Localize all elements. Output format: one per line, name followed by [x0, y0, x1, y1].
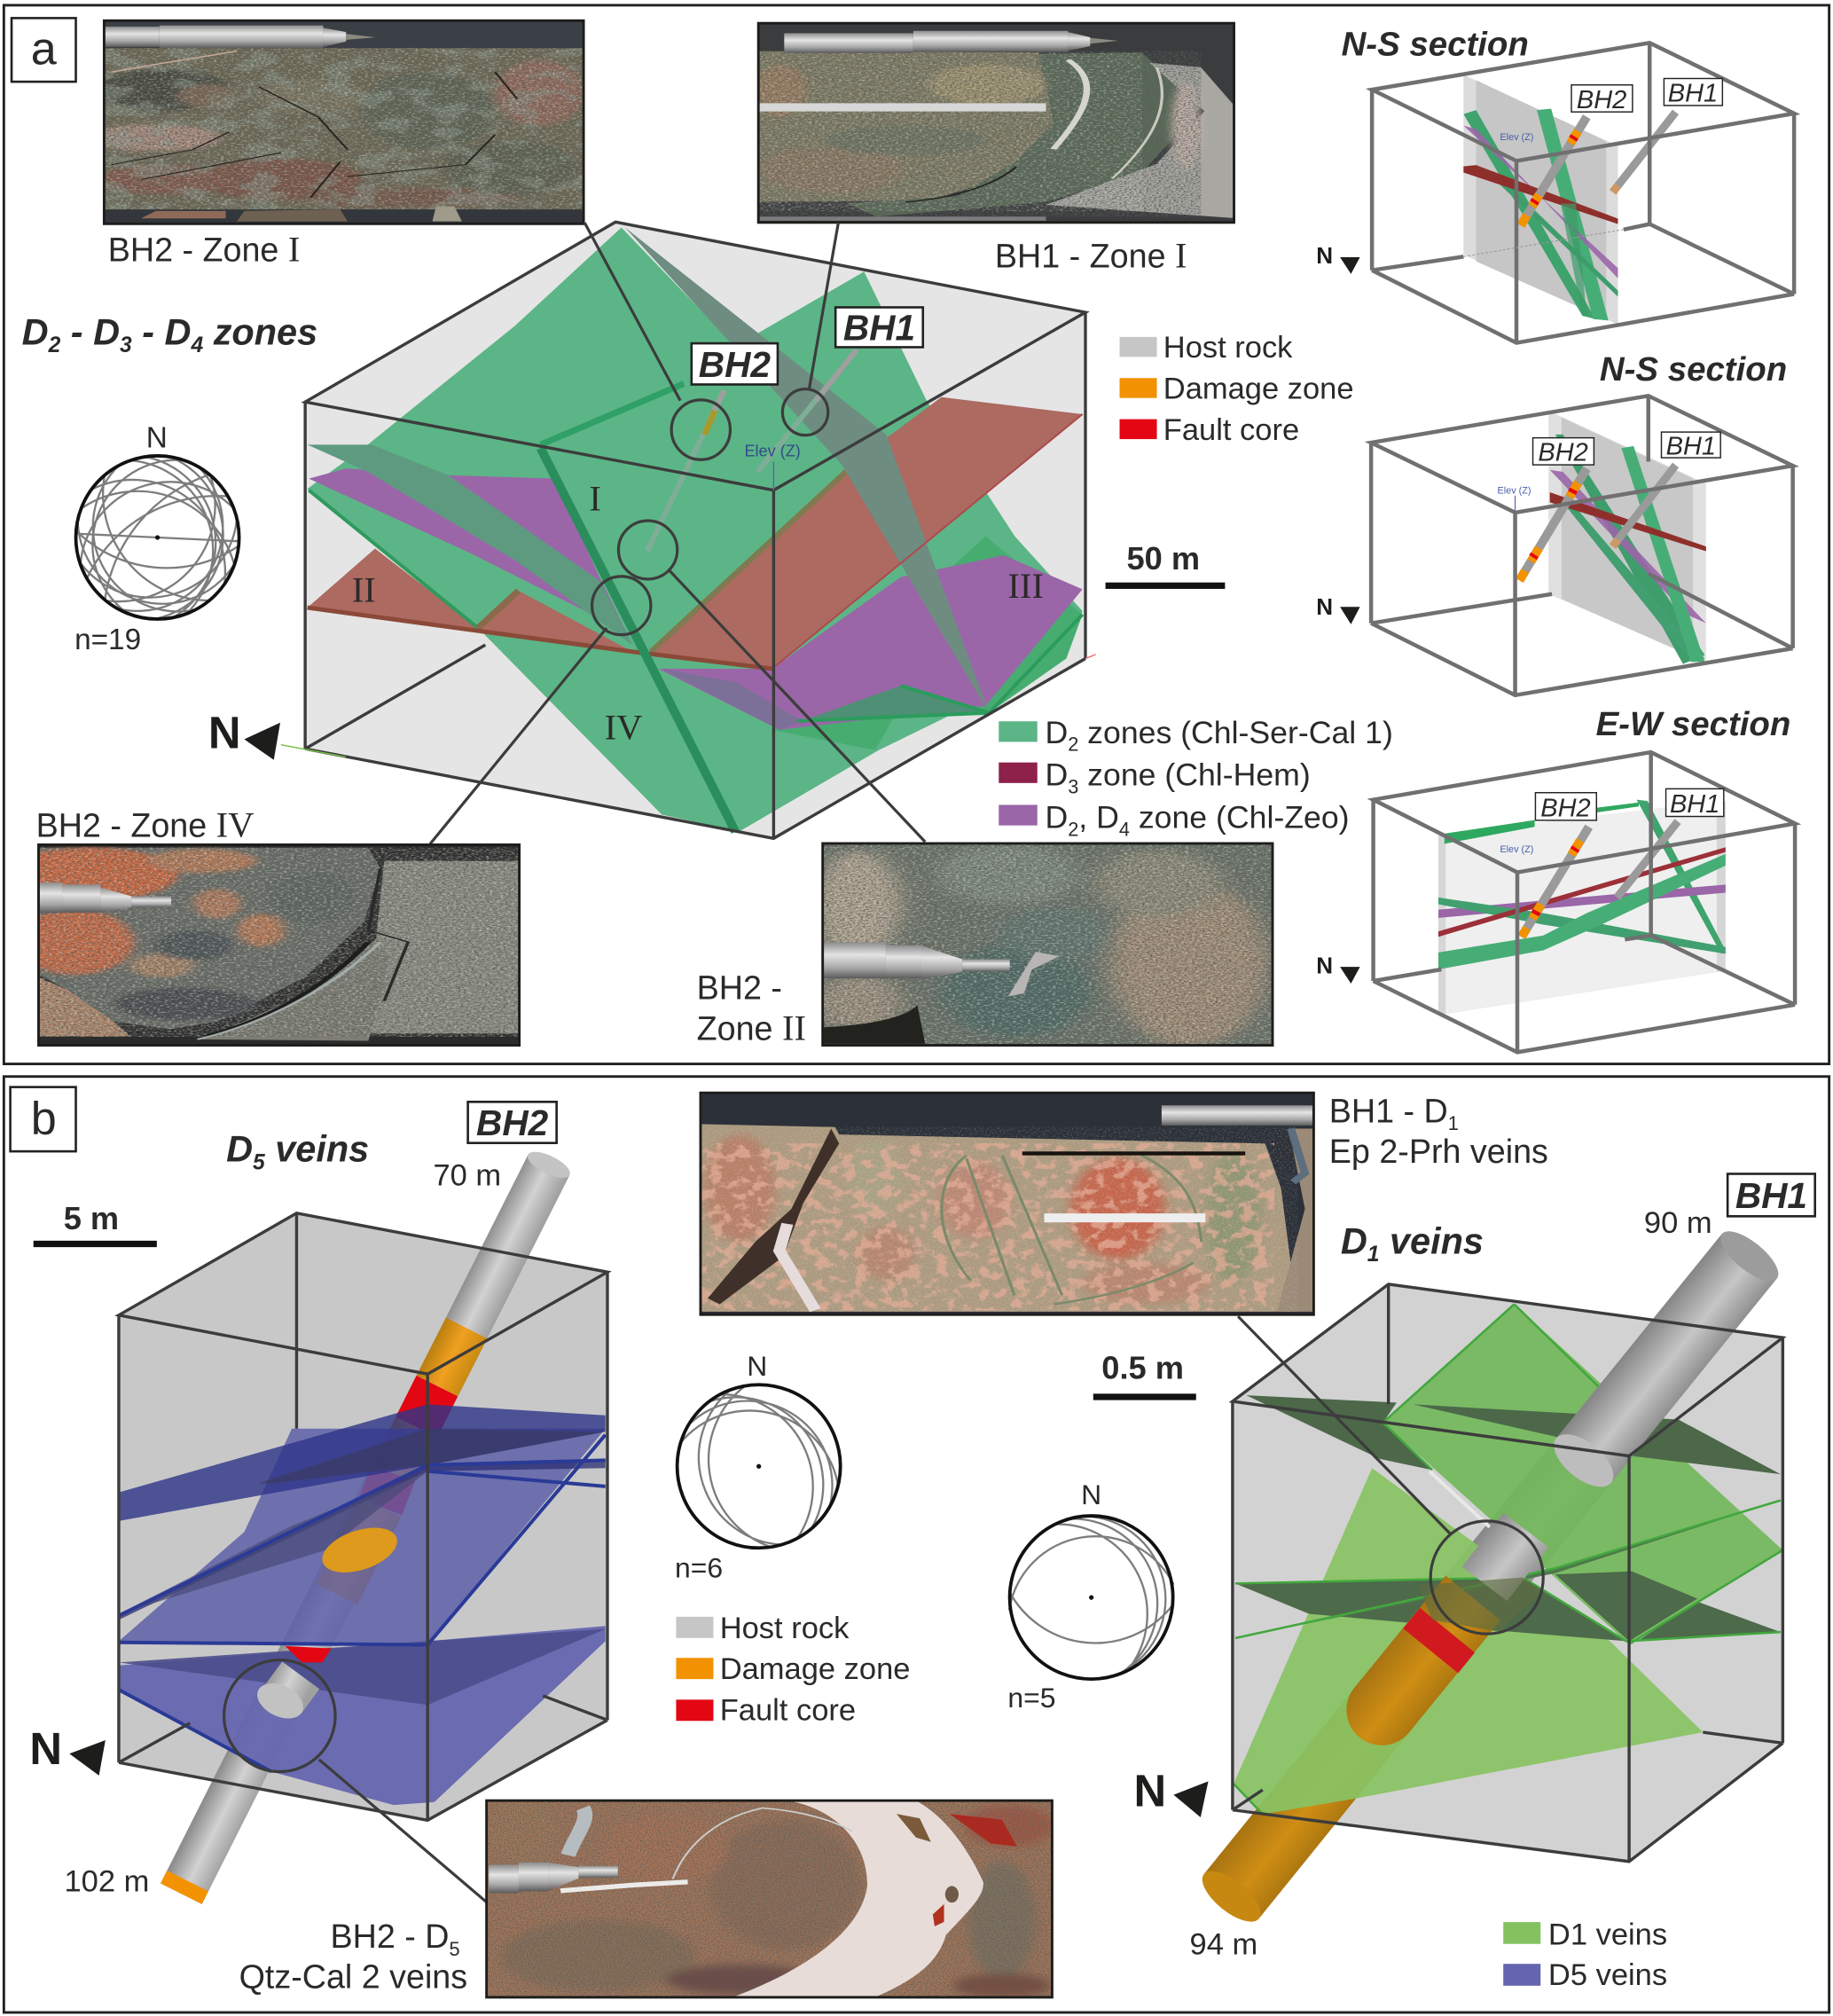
- stereonet n=5: N: [1081, 1479, 1101, 1510]
- section: N-S upper: N-S section: [1342, 25, 1529, 63]
- borehole top end: [1713, 1223, 1786, 1290]
- photo: BH1 Zone I core: [759, 25, 1233, 222]
- label BH2: BH2: [699, 344, 771, 385]
- stereonet n=5: [1007, 1479, 1173, 1714]
- borehole orange rounded end: [1346, 1675, 1417, 1745]
- stereonet n=6: [675, 1350, 841, 1584]
- label BH2: BH2: [476, 1102, 549, 1143]
- legend: zones: zone (Chl-Hem): [1078, 757, 1311, 793]
- heading: D2 D3 D4 zones: - D: [132, 311, 191, 353]
- scale bar 5 m: [34, 1200, 157, 1247]
- heading: D5 veins: veins: [265, 1128, 369, 1170]
- panel letter b: [11, 1087, 76, 1151]
- section: E-W: BH1: [1670, 790, 1719, 819]
- legend: zones: D: [1045, 757, 1068, 793]
- dark green plane left: [308, 444, 632, 645]
- heading: D2 D3 D4 zones: 2: [48, 333, 61, 357]
- legend: zones: , D: [1078, 800, 1119, 835]
- borehole red band: [1430, 1630, 1447, 1651]
- section: N-S upper: Elev (Z): [1500, 132, 1533, 143]
- sheet gap: [1430, 1471, 1490, 1527]
- legend: zones: 2: [1068, 733, 1078, 756]
- legend: veins: [1503, 1918, 1667, 1992]
- legend: borehole zones b: Host rock: [720, 1612, 850, 1645]
- borehole top segment: [1584, 1256, 1750, 1461]
- caption: BH1 D1: [1329, 1093, 1548, 1170]
- stereonet n=6: N: [747, 1350, 767, 1382]
- heading: D5 veins: 5: [253, 1150, 265, 1174]
- scale bar 50 m: 50 m: [1127, 540, 1200, 577]
- section: N-S middle: N: [1316, 593, 1333, 620]
- scale bar 0.5 m: 0.5 m: [1101, 1350, 1184, 1386]
- legend: zones: zone (Chl-Zeo): [1130, 800, 1350, 835]
- purple D2 D4 plane right: [658, 555, 1083, 730]
- zone numeral II: II: [352, 569, 376, 609]
- section: N-S middle: BH2: [1538, 439, 1588, 467]
- photo: BH2 Zone IV core: [39, 846, 518, 1045]
- dark vein planes: [1246, 1395, 1432, 1470]
- D3 zone plane: [308, 397, 1083, 669]
- north arrow: [1133, 1766, 1209, 1817]
- caption: BH2 D5: [239, 1918, 467, 1996]
- caption: BH2 D5: BH2 - D: [331, 1918, 449, 1955]
- heading: D2 D3 D4 zones: zones: [203, 311, 317, 353]
- D1 vein block with BH1: [1195, 1223, 1786, 1931]
- caption: BH2 Zone IV: BH2 - Zone IV: [36, 805, 255, 845]
- label BH1: BH1: [843, 307, 915, 348]
- heading: D2 D3 D4 zones: 4: [190, 333, 203, 357]
- depth 94 m: 94 m: [1190, 1927, 1257, 1961]
- red band in lower borehole: [285, 1646, 331, 1662]
- legend: zones: [999, 715, 1393, 840]
- stereonet n=5: n=5: [1007, 1682, 1055, 1714]
- dark plane over borehole: [1419, 1578, 1544, 1632]
- panel letter a: a: [31, 24, 58, 75]
- photo: BH2 Zone I core: [105, 21, 583, 223]
- zone numeral IV: IV: [605, 708, 642, 748]
- block faces: [305, 222, 1085, 838]
- section: N-S middle: N-S section: [1600, 350, 1787, 388]
- thick zone traces: [308, 384, 1083, 832]
- photo border: [701, 1093, 1313, 1314]
- section: E-W: E-W section: [1596, 705, 1790, 743]
- borehole BH2: [181, 1165, 549, 1894]
- panel letter b: b: [31, 1094, 57, 1145]
- borehole BH1 full: [1232, 1256, 1750, 1896]
- legend: borehole zones: Damage zone: [1163, 372, 1354, 405]
- borehole cut end: [1545, 1424, 1623, 1497]
- elevation label: Elev (Z): [744, 443, 801, 460]
- D2 main sheet: [308, 227, 1083, 832]
- section: N-S middle: [1316, 350, 1793, 695]
- legend: veins: D1 veins: [1548, 1918, 1667, 1951]
- caption: BH1 Zone I: BH1 - Zone I: [995, 236, 1187, 276]
- section: E-W: Elev (Z): [1500, 844, 1533, 855]
- legend: borehole zones b: Fault core: [720, 1694, 856, 1728]
- caption: BH2 Zone II: [697, 969, 806, 1048]
- zone numeral I: I: [589, 479, 601, 519]
- green overlay centre: [574, 475, 831, 645]
- section: E-W: BH2: [1540, 795, 1591, 823]
- section: N-S upper: BH2: [1577, 86, 1626, 114]
- panel letter a: [12, 18, 76, 82]
- D1 lower vein plane: [1234, 1468, 1703, 1814]
- photo border: [758, 23, 1234, 223]
- photo border: [38, 844, 520, 1046]
- orange section in sheet: [315, 1519, 404, 1581]
- legend: borehole zones b: [676, 1612, 910, 1728]
- legend: veins: D5 veins: [1548, 1958, 1667, 1992]
- stereonet n=19: [74, 422, 239, 656]
- legend: borehole zones: [1120, 331, 1354, 447]
- main 3D block of zones: [281, 222, 1096, 843]
- caption: BH1 D1: Ep 2-Prh veins: [1329, 1133, 1548, 1170]
- D5 vein block with BH2: [119, 1147, 607, 1902]
- section: N-S middle: Elev (Z): [1498, 486, 1531, 497]
- borehole orange segment: [1382, 1598, 1473, 1710]
- section: N-S upper: BH1: [1668, 80, 1718, 108]
- legend: zones: zones (Chl-Ser-Cal 1): [1078, 715, 1393, 750]
- scale bar 50 m: [1106, 540, 1225, 589]
- north arrow: [208, 708, 280, 760]
- borehole segment in circle: [1484, 1530, 1526, 1584]
- panel b: veins: [4, 1077, 1829, 2012]
- north arrow: N: [29, 1723, 62, 1774]
- heading: D2 D3 D4 zones: - D: [60, 311, 120, 353]
- scale bar 5 m: 5 m: [64, 1200, 119, 1236]
- heading: D2 D3 D4 zones: D: [22, 311, 49, 353]
- label BH1: BH1: [1735, 1175, 1807, 1216]
- borehole cap end: [252, 1676, 309, 1725]
- caption: BH1 D1: 1: [1448, 1112, 1459, 1134]
- caption: BH2 D5: Qtz-Cal 2 veins: [239, 1958, 467, 1996]
- photo border: [487, 1800, 1052, 1997]
- stereonet n=19: n=19: [74, 624, 141, 656]
- detail circle and leader: [224, 1660, 487, 1902]
- legend: borehole zones: Host rock: [1163, 331, 1293, 365]
- block wireframe: [1233, 1284, 1782, 1862]
- heading: D1 veins: veins: [1379, 1220, 1484, 1261]
- section: N-S upper: N: [1316, 242, 1333, 269]
- photo: BH2 Zone II core: [824, 844, 1272, 1045]
- panel a: D2-D3-D4 zones: [3, 5, 1829, 1064]
- borehole cap under sheet: [283, 1675, 301, 1699]
- borehole lower end: [1195, 1863, 1269, 1931]
- detail circle and leader: [1238, 1316, 1543, 1634]
- heading: D1 veins: D: [1341, 1220, 1367, 1261]
- section: E-W: N: [1316, 952, 1333, 978]
- legend: zones: 3: [1068, 775, 1078, 797]
- D1 upper vein plane: [1383, 1304, 1782, 1644]
- borehole top end: [524, 1147, 574, 1183]
- depth 90 m: 90 m: [1644, 1206, 1712, 1240]
- heading: D1 veins: 1: [1367, 1243, 1379, 1267]
- caption: BH2 Zone II: BH2 -: [697, 969, 782, 1006]
- legend: borehole zones: Fault core: [1163, 413, 1299, 447]
- north arrow: N: [1133, 1766, 1166, 1816]
- legend: zones: D: [1045, 715, 1068, 750]
- depth 102 m: 102 m: [64, 1864, 149, 1898]
- dark kite plane: [625, 227, 989, 713]
- caption: BH2 Zone II: Zone II: [697, 1008, 806, 1048]
- detail circles and leader lines: [430, 223, 925, 843]
- photo: BH2 D5 core: [488, 1802, 1051, 1996]
- legend: zones: D: [1045, 800, 1068, 835]
- scale bar 0.5 m: [1093, 1350, 1196, 1400]
- section: N-S middle: BH1: [1666, 432, 1716, 460]
- boreholes in block: [647, 349, 857, 552]
- photo border: [104, 20, 584, 224]
- heading: D2 D3 D4 zones: 3: [120, 333, 132, 357]
- photo: BH1 D1 core: [701, 1094, 1312, 1314]
- legend: zones: 2: [1068, 818, 1078, 840]
- caption: BH2 Zone I: BH2 - Zone I: [108, 229, 300, 269]
- legend: zones: 4: [1119, 818, 1130, 840]
- section: N-S upper: [1316, 25, 1794, 343]
- depth 70 m: 70 m: [433, 1159, 501, 1193]
- heading: D5 veins: D: [226, 1128, 253, 1170]
- stereonet n=19: N: [146, 422, 168, 455]
- caption: BH1 D1: BH1 - D: [1329, 1093, 1448, 1130]
- blue sheets: [119, 1626, 606, 1805]
- north arrow: N: [208, 708, 240, 758]
- stereonet n=6: n=6: [675, 1552, 723, 1584]
- zone numeral III: III: [1007, 566, 1044, 606]
- north arrow: [29, 1723, 106, 1776]
- block wireframe: [119, 1213, 607, 1902]
- caption: BH2 D5: 5: [449, 1938, 460, 1960]
- section: E-W: [1316, 705, 1795, 1052]
- photo border: [823, 843, 1273, 1046]
- block wireframe: [305, 222, 1085, 838]
- purple D2 D4 plane left: [309, 468, 632, 645]
- legend: borehole zones b: Damage zone: [720, 1652, 910, 1686]
